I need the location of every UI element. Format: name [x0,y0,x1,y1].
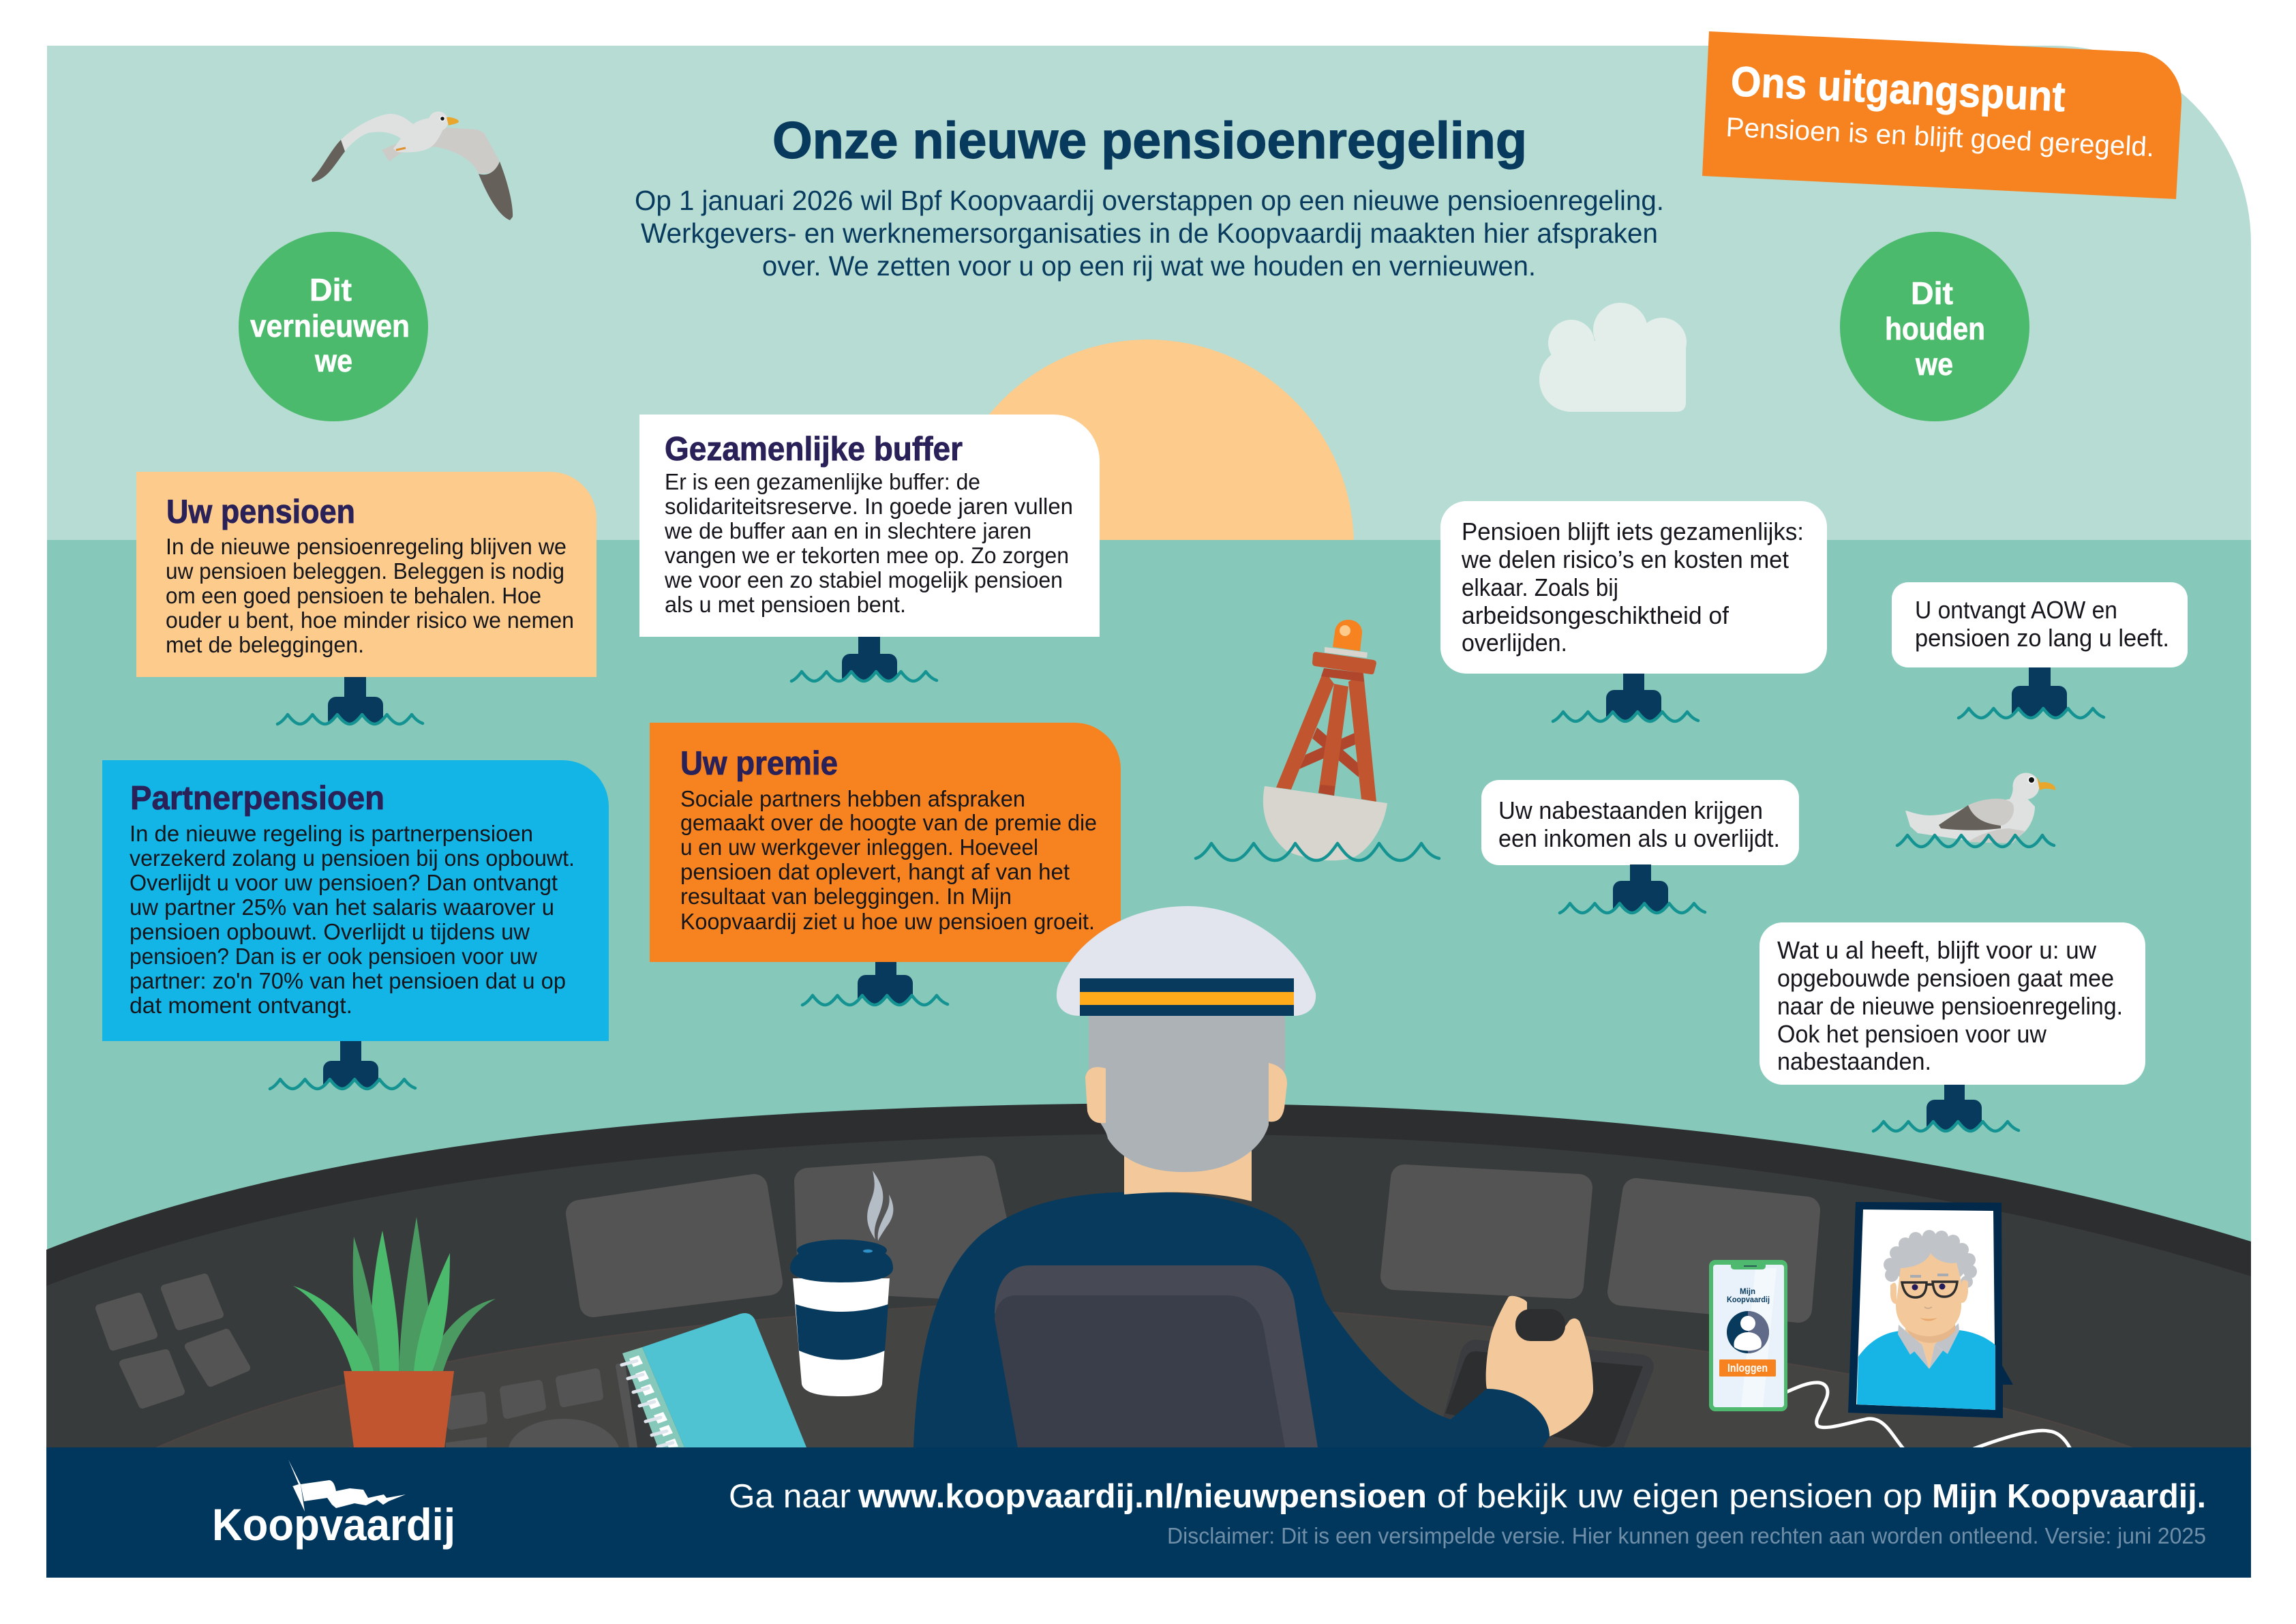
intro text: over. We zetten voor u op een rij wat we houden en vernieuwen. [762,250,1536,282]
panel: uw premie [650,723,1121,962]
panel: gezamenlijke buffer [639,415,1100,637]
panel: uw pensioen [136,472,596,677]
bubble: nabestaanden [1481,780,1799,865]
cloud [1539,303,1687,412]
icon: steam [867,1171,893,1241]
hair [1089,1009,1285,1172]
bubble: gezamenlijk: arbeidsongeschiktheid of [1462,601,1729,629]
text: partnerpensioen body: Overlijdt u voor uw pensioen? Dan ontvangt [130,870,558,895]
text: buffer body: we voor een zo stabiel mogelijk pensioen [664,567,1063,592]
bubble: gezamenlijk: we delen risico’s en kosten met [1461,545,1789,573]
disclaimer: Disclaimer: Dit is een versimpelde versie. Hier kunnen geen rechten aan worden ontleend. Versie: juni 2025 [1167,1523,2206,1548]
icon: smartphone: Inloggen [1727,1362,1768,1374]
text: partnerpensioen body: dat moment ontvangt. [130,993,352,1018]
text: buffer body: we de buffer aan en in slechtere jaren [664,518,1031,543]
logo: koopvaardij: Koopvaardij [212,1499,455,1550]
circle: dit vernieuwen we: Dit [309,272,352,307]
chair [995,1265,1318,1447]
badge: ons uitgangspunt: Ons uitgangspunt [1729,58,2066,121]
panel: uw pensioen: Uw pensioen [166,494,355,530]
bubble: AOW [1892,582,2188,667]
text: partnerpensioen body: verzekerd zolang u pensioen bij ons opbouwt. [130,845,575,871]
sleeve [1432,1389,1550,1447]
icon: control lever tablet [1435,1340,1654,1447]
icon: charging cable [1786,1383,2070,1449]
bubble: gezamenlijk: overlijden. [1462,629,1567,657]
icon: portrait in frame [1848,1202,2013,1418]
hand [1486,1296,1593,1437]
circle: dit vernieuwen we: vernieuwen [250,308,410,344]
intro text [635,185,1664,282]
panel: uw premie: Uw premie [680,745,838,782]
post: partnerpensioen [270,1041,415,1102]
post: gezamenlijk [1553,674,1698,735]
footer call to action [729,1478,2206,1515]
icon: smartphone [1709,1260,1787,1411]
text: uw premie body: Koopvaardij ziet u hoe uw pensioen groeit. [680,909,1095,934]
icon: swimming seagull [1897,773,2055,847]
text: buffer body: Er is een gezamenlijke buffer: de [665,469,980,494]
text: buffer body: solidariteitsreserve. In goede jaren vullen [665,494,1073,519]
post: uw premie [802,962,948,1019]
heading: Onze nieuwe pensioenregeling [772,112,1527,170]
footer call to action: Ga naar [729,1478,851,1515]
bubble: wat u al heeft: naar de nieuwe pensioenregeling. [1777,992,2123,1020]
bubble: AOW: pensioen zo lang u leeft. [1915,624,2169,652]
text: partnerpensioen body: partner: zo'n 70% van het pensioen dat u op [130,968,566,993]
neck [1124,1145,1252,1201]
badge: ons uitgangspunt: Pensioen is en blijft goed geregeld. [1725,112,2155,162]
circle: dit houden we: we [1915,346,1953,382]
text: uw pensioen body [166,534,574,657]
text: buffer body: als u met pensioen bent. [665,592,906,617]
icon: coffee cup [790,1171,893,1396]
lever knob [1515,1309,1565,1341]
text: uw premie body: gemaakt over de hoogte van de premie die [680,810,1097,835]
panel: partnerpensioen [102,760,609,1041]
footer call to action: of bekijk uw eigen pensioen op [1437,1478,1922,1515]
bubble: gezamenlijk: elkaar. Zoals bij [1462,573,1618,601]
icon: plant [293,1217,496,1447]
bubble: wat u al heeft: nabestaanden. [1777,1047,1931,1075]
panel: partnerpensioen: Partnerpensioen [130,780,384,817]
text: uw premie body: u en uw werkgever inleggen. Hoeveel [680,834,1038,860]
bubble: wat u al heeft: Ook het pensioen voor uw [1777,1020,2047,1048]
text: uw premie body [680,786,1097,934]
text: partnerpensioen body: pensioen opbouwt. Overlijdt u tijdens uw [130,919,530,944]
bubble: wat u al heeft [1759,922,2145,1085]
bubble: AOW: U ontvangt AOW en [1915,596,2117,624]
footer call to action: Mijn Koopvaardij. [1932,1478,2206,1515]
text: partnerpensioen body: In de nieuwe regeling is partnerpensioen [130,821,533,846]
ship dashboard [46,1103,2251,1452]
text: partnerpensioen body: pensioen? Dan is er ook pensioen voor uw [130,944,537,969]
logo: koopvaardij [212,1460,455,1550]
bubble: gezamenlijk: Pensioen blijft iets gezamenlijks: [1462,517,1804,545]
text: uw pensioen body: uw pensioen beleggen. Beleggen is nodig [166,558,564,584]
circle: dit vernieuwen we: we [314,343,352,378]
text: uw pensioen body: ouder u bent, hoe minder risico we nemen [166,607,574,633]
icon: buoy [1196,620,1439,860]
bubble: nabestaanden: een inkomen als u overlijdt. [1498,824,1780,852]
circle: dit vernieuwen we [239,232,428,421]
captain [913,906,1593,1447]
post: AOW [1959,667,2104,732]
bubble: gezamenlijk [1440,501,1827,674]
text: uw pensioen body: met de beleggingen. [166,632,364,657]
cap [1057,906,1316,1016]
footer call to action: www.koopvaardij.nl/nieuwpensioen [858,1478,1427,1515]
bubble: nabestaanden: Uw nabestaanden krijgen [1498,796,1763,824]
text: partnerpensioen body [130,821,575,1018]
circle: dit houden we: Dit [1911,275,1953,311]
seagull flying [312,112,513,220]
post: nabestaanden [1560,864,1705,927]
jacket [913,1192,1543,1447]
circle: dit houden we [1840,232,2029,421]
text: uw pensioen body: In de nieuwe pensioenregeling blijven we [166,534,567,559]
bubble: wat u al heeft: opgebouwde pensioen gaat mee [1777,964,2114,992]
text: uw premie body: Sociale partners hebben afspraken [680,786,1025,811]
icon: notebook [616,1313,806,1447]
sun [942,340,1354,751]
sky background [47,46,2251,545]
badge: ons uitgangspunt [1702,31,2181,199]
footer band [46,1447,2251,1578]
icon: smartphone: Mijn [1740,1287,1755,1296]
intro text: Werkgevers- en werknemersorganisaties in de Koopvaardij maakten hier afspraken [641,217,1658,249]
text: uw pensioen body: om een goed pensioen te behalen. Hoe [166,583,541,608]
text: buffer body [664,469,1073,617]
text: uw premie body: pensioen dat oplevert, hangt af van het [680,859,1070,884]
text: uw premie body: resultaat van beleggingen. In Mijn [680,884,1012,909]
circle: dit houden we: houden [1885,311,1985,346]
post: uw pensioen [277,677,423,738]
text: partnerpensioen body: uw partner 25% van het salaris waarover u [130,894,554,920]
ears [1085,1063,1287,1123]
intro text: Op 1 januari 2026 wil Bpf Koopvaardij overstappen op een nieuwe pensioenregeling. [635,185,1664,216]
sea [47,540,2251,1454]
post: buffer [791,637,937,695]
panel: gezamenlijke buffer: Gezamenlijke buffer [665,431,963,468]
text: buffer body: vangen we er tekorten mee op. Zo zorgen [665,543,1069,568]
post: wat u al heeft [1873,1085,2019,1145]
bubble: wat u al heeft: Wat u al heeft, blijft voor u: uw [1777,936,2097,964]
icon: smartphone: Koopvaardij [1727,1295,1770,1304]
